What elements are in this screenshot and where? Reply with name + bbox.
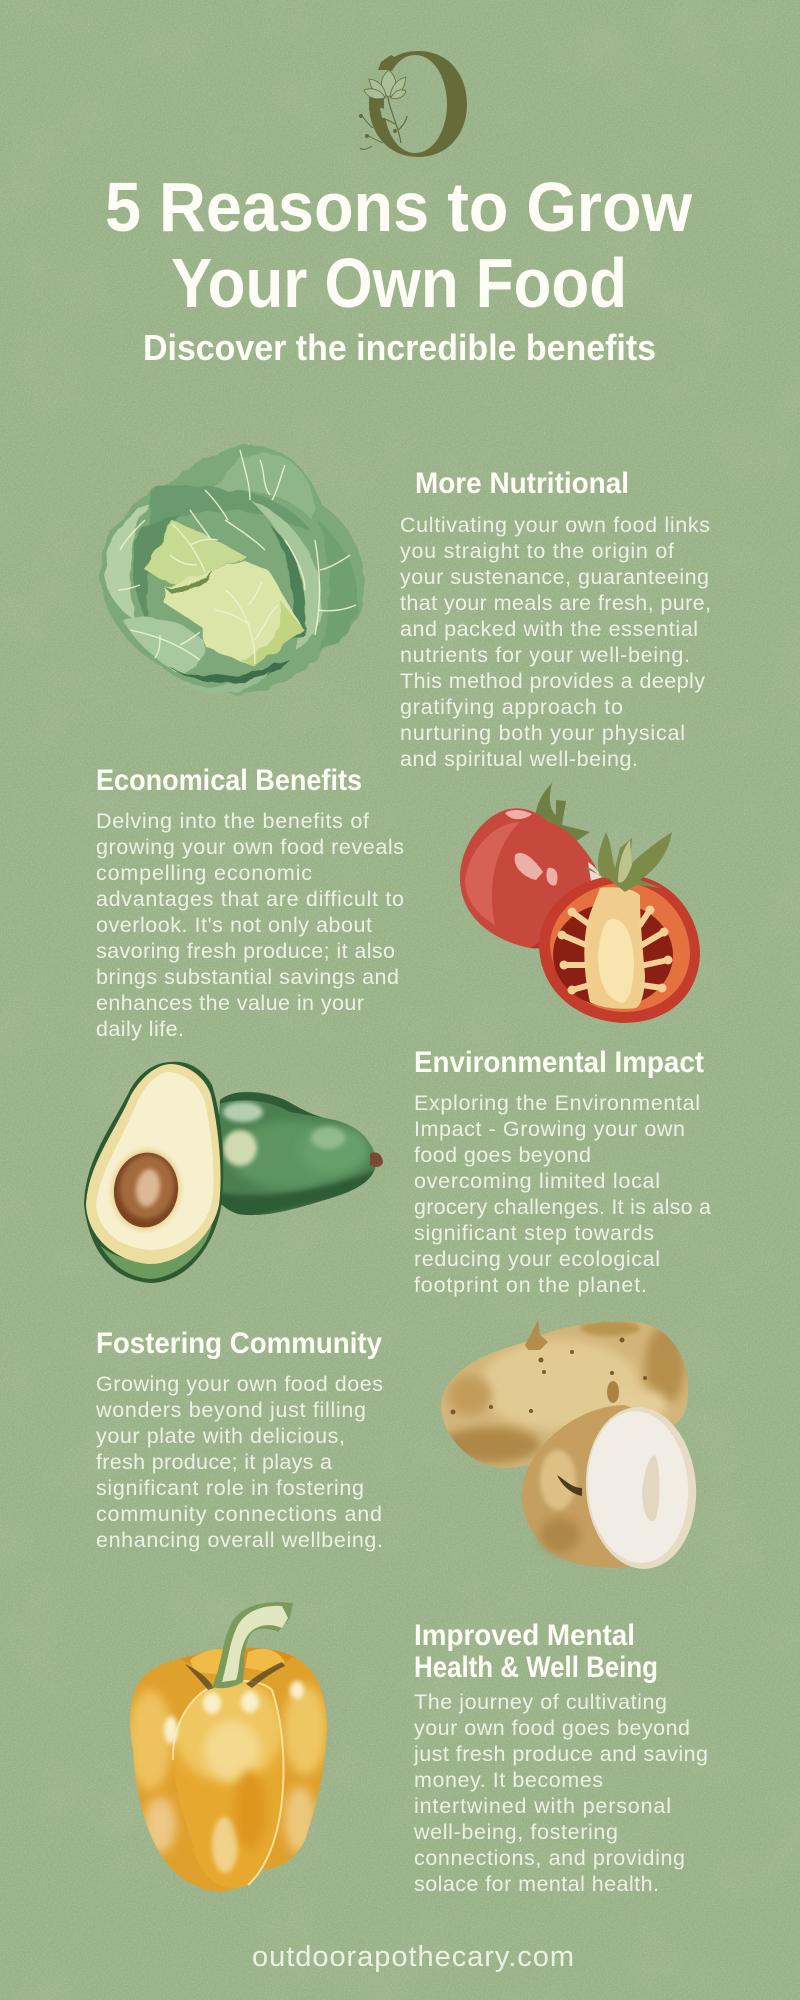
text block <box>400 513 711 771</box>
icon: cabbage <box>100 445 365 695</box>
panel: fostering community <box>95 1315 702 1573</box>
text block: Exploring the Environmental <box>414 1091 700 1115</box>
text block: and spiritual well-being. <box>400 747 638 771</box>
text block: well-being, fostering <box>413 1820 618 1844</box>
text block: that your meals are fresh, pure, <box>400 591 711 615</box>
text block: your plate with delicious, <box>96 1424 345 1448</box>
text block: significant role in fostering <box>96 1476 364 1500</box>
text block: advantages that are difficult to <box>96 887 404 911</box>
text block: solace for mental health. <box>414 1872 659 1896</box>
text block: wonders beyond just filling <box>95 1398 366 1422</box>
text block: Impact - Growing your own <box>414 1117 685 1141</box>
icon: avocado <box>84 1062 383 1283</box>
title: 5 Reasons to Grow <box>105 168 692 246</box>
text block: community connections and <box>96 1502 382 1526</box>
text block: and packed with the essential <box>400 617 698 641</box>
text block: nutrients for your well-being. <box>400 643 690 667</box>
title: Your Own Food <box>171 244 627 322</box>
text block: Growing your own food does <box>96 1372 383 1396</box>
heading: Environmental Impact <box>414 1046 704 1079</box>
text block: Delving into the benefits of <box>96 809 369 833</box>
text block: This method provides a deeply <box>400 669 705 693</box>
panel: more nutritional <box>100 445 711 771</box>
text block: footprint on the planet. <box>414 1273 647 1297</box>
text block: intertwined with personal <box>414 1794 671 1818</box>
text block: money. It becomes <box>414 1768 603 1792</box>
text block <box>95 1372 383 1552</box>
text block: food goes beyond <box>414 1143 591 1167</box>
text block: reducing your ecological <box>414 1247 660 1271</box>
text block: overcoming limited local <box>414 1169 660 1193</box>
logo: floral letter O <box>359 51 467 157</box>
title <box>105 168 692 322</box>
panel: economical benefits <box>96 764 700 1041</box>
heading: Health & Well Being <box>414 1651 658 1684</box>
text block <box>414 1091 711 1297</box>
text block: significant step towards <box>414 1221 654 1245</box>
text block: your sustenance, guaranteeing <box>400 565 709 589</box>
text block: daily life. <box>96 1017 184 1041</box>
text block: savoring fresh produce; it also <box>96 939 395 963</box>
heading: Fostering Community <box>96 1327 382 1360</box>
icon: tomatoes <box>460 783 700 1023</box>
heading: Improved Mental <box>414 1619 635 1652</box>
heading <box>414 1619 658 1684</box>
text block: connections, and providing <box>414 1846 685 1870</box>
text block: compelling economic <box>96 861 312 885</box>
footer: website: outdoorapothecary.com <box>252 1941 574 1973</box>
text block: growing your own food reveals <box>96 835 404 859</box>
icon: potatoes <box>435 1315 702 1573</box>
text block: nurturing both your physical <box>400 721 685 745</box>
text block: gratifying approach to <box>400 695 623 719</box>
text block: just fresh produce and saving <box>413 1742 708 1766</box>
text block: brings substantial savings and <box>96 965 399 989</box>
heading: Economical Benefits <box>96 764 362 797</box>
text block: fresh produce; it plays a <box>96 1450 332 1474</box>
icon: yellow bell pepper <box>125 1602 335 1900</box>
panel: environmental impact <box>84 1046 711 1297</box>
text block: Cultivating your own food links <box>400 513 710 537</box>
text block: grocery challenges. It is also a <box>414 1195 711 1219</box>
text block: your own food goes beyond <box>414 1716 690 1740</box>
subtitle: Discover the incredible benefits <box>143 327 656 368</box>
text block: enhancing overall wellbeing. <box>96 1528 383 1552</box>
panel: improved mental health <box>125 1602 708 1900</box>
text block <box>413 1690 708 1896</box>
text block: The journey of cultivating <box>414 1690 667 1714</box>
heading: More Nutritional <box>415 467 629 500</box>
text block: you straight to the origin of <box>400 539 674 563</box>
text block: enhances the value in your <box>96 991 364 1015</box>
text block: overlook. It's not only about <box>96 913 372 937</box>
text block <box>96 809 404 1041</box>
